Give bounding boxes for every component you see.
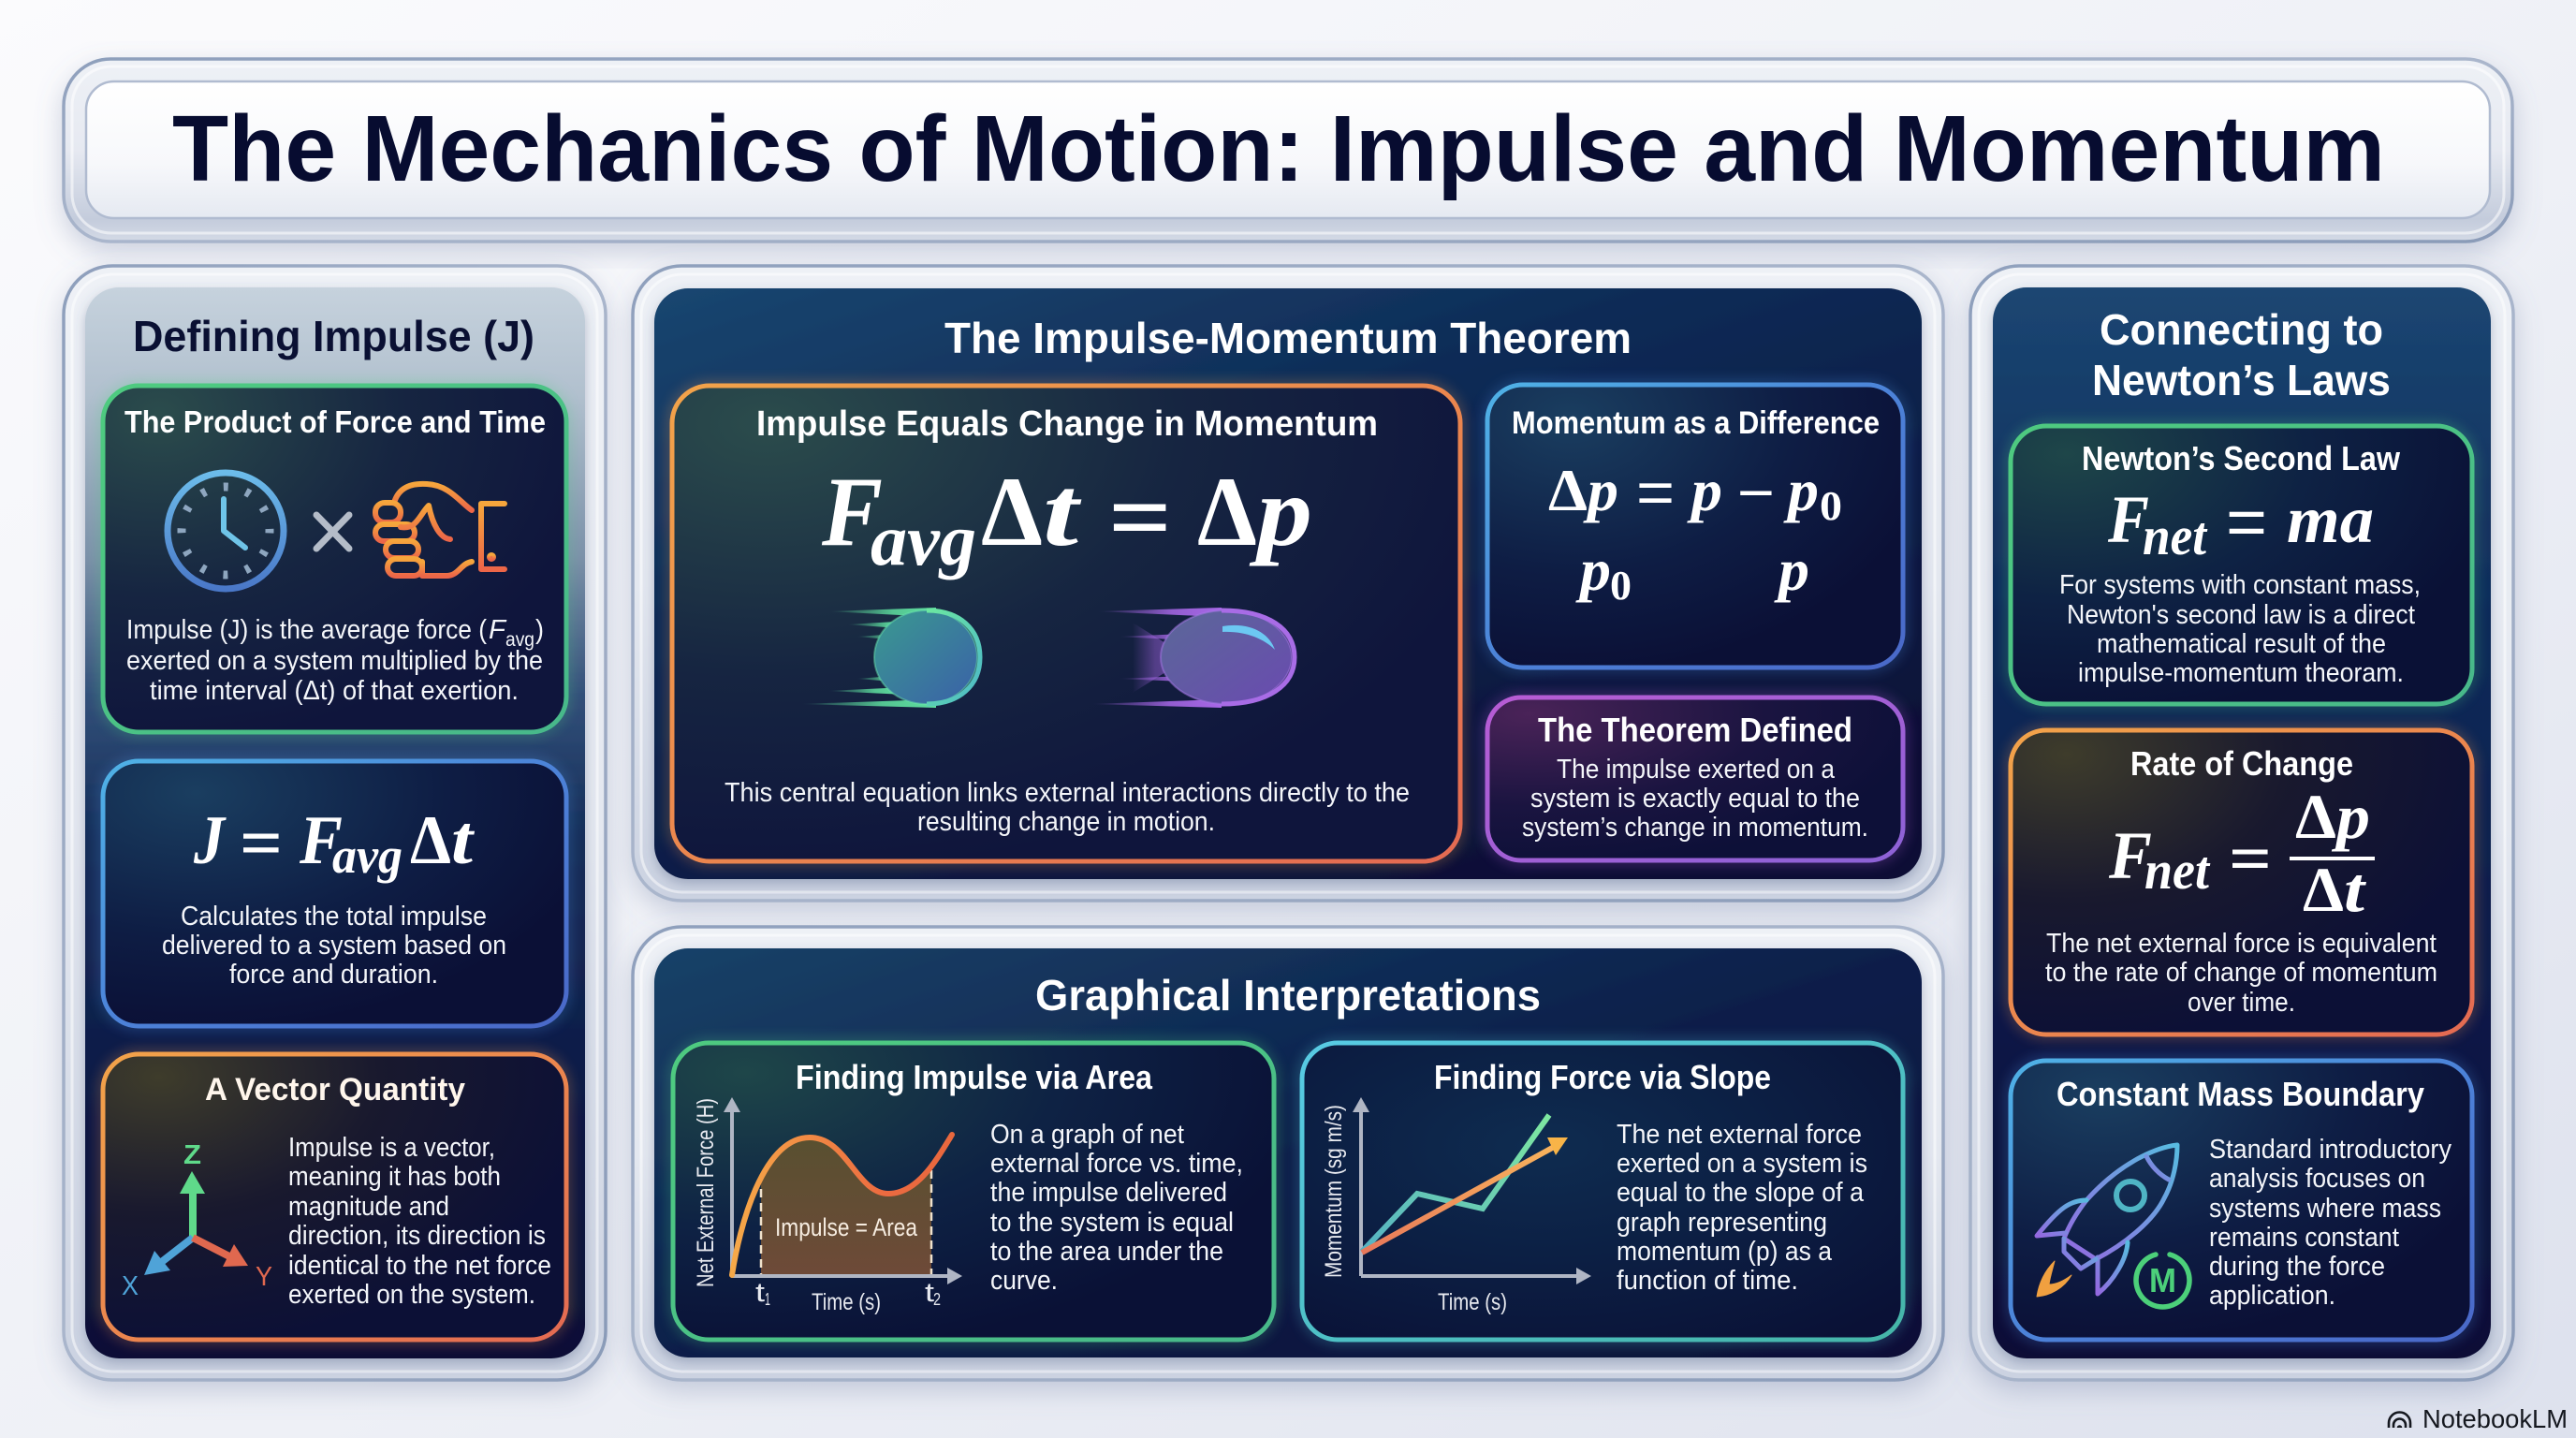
card body text [2059, 570, 2421, 688]
card body text: Calculates the total impulse [181, 902, 487, 932]
card body text: For systems with constant mass, [2059, 570, 2421, 600]
card body text: F [489, 615, 507, 645]
icon: xyz axes: Y [256, 1262, 272, 1292]
notebooklm watermark: NotebookLM [2422, 1404, 2568, 1433]
panel: defining impulse [64, 266, 606, 1380]
card heading: Impulse Equals Change in Momentum [756, 404, 1378, 444]
card body text: impulse-momentum theoram. [2078, 658, 2404, 688]
icon: constant mass badge: M [2149, 1261, 2176, 1299]
card body text: exerted on the system. [288, 1280, 535, 1310]
card body text [1617, 1120, 1867, 1296]
card body text: ) [535, 615, 544, 645]
card body text: momentum (p) as a [1617, 1237, 1833, 1267]
chart: force vs time: t [925, 1278, 934, 1308]
card body text: the impulse delivered [990, 1178, 1227, 1208]
card body text [2045, 929, 2437, 1018]
chart: momentum vs time: Time (s) [1438, 1289, 1507, 1315]
formula: F net = delta p over delta t: t [2344, 854, 2366, 925]
title: The Mechanics of Motion: Impulse and Momentum [172, 96, 2385, 201]
icon: xyz axes [122, 1140, 272, 1301]
card: finding force via slope [1302, 1043, 1903, 1340]
card heading: Finding Impulse via Area [796, 1058, 1153, 1096]
card: impulse equals change in momentum [672, 386, 1460, 861]
formula: main equation [821, 457, 1312, 580]
card body text: avg [505, 629, 534, 651]
icon: green moving ball [800, 608, 980, 708]
panel: graphical interpretations [633, 927, 1943, 1380]
icon: fist [375, 484, 505, 576]
card body text: force and duration. [229, 960, 438, 990]
card body text: system’s change in momentum. [1522, 813, 1868, 843]
formula: delta p: − [1737, 459, 1775, 526]
formula: J = F avg delta t: = [240, 805, 283, 882]
formula: F net = ma: = [2226, 485, 2267, 560]
icon: rocket [2037, 1145, 2177, 1297]
card body text [1522, 755, 1868, 843]
card: momentum as a difference [1487, 385, 1903, 668]
chart: force vs time: Time (s) [812, 1289, 881, 1315]
icon: purple moving ball [1090, 608, 1295, 708]
card body text: Impulse (J) is the average force ( [126, 615, 487, 645]
formula: J = F avg delta t: t [451, 802, 476, 879]
card body text: application. [2209, 1281, 2335, 1311]
formula: F net = ma: net [2143, 506, 2208, 566]
card body text: during the force [2209, 1252, 2385, 1282]
chart: momentum vs time: Momentum (sg m/s) [1321, 1105, 1347, 1278]
chart: force vs time: Impulse = Area [775, 1213, 918, 1241]
card heading: Rate of Change [2130, 744, 2353, 783]
card body text: delivered to a system based on [162, 931, 506, 961]
icon: xyz axes: Z [183, 1140, 201, 1170]
formula: delta p: Δ [1548, 457, 1588, 523]
heading: connecting to newton's laws: Connecting to [2100, 305, 2383, 354]
formula: initial and final momentum: p [1575, 536, 1611, 603]
card heading: Constant Mass Boundary [2056, 1075, 2424, 1113]
card: product of force and time [103, 386, 566, 732]
card body text: to the rate of change of momentum [2045, 958, 2437, 988]
formula: F net = ma: F [2107, 482, 2149, 557]
card body text: The net external force is equivalent [2046, 929, 2437, 959]
card: finding impulse via area [673, 1043, 1274, 1340]
card body text: curve. [990, 1266, 1058, 1296]
heading: connecting to newton's laws: Newton’s Laws [2092, 356, 2391, 404]
icon: xyz axes: X [122, 1271, 139, 1301]
chart: force vs time: 2 [933, 1290, 941, 1309]
card body text: exerted on a system multiplied by the [126, 646, 543, 676]
formula: F net = delta p over delta t: Δ [2303, 854, 2344, 925]
card body text: direction, its direction is [288, 1221, 546, 1251]
formula: F net = delta p over delta t: Δ [2295, 781, 2336, 852]
card body text: remains constant [2209, 1223, 2399, 1253]
chart: momentum vs time [1321, 1097, 1591, 1315]
formula: F net = delta p over delta t [2108, 781, 2375, 925]
card: vector quantity [103, 1054, 566, 1340]
heading: defining impulse: Defining Impulse (J) [133, 312, 534, 360]
card body text: meaning it has both [288, 1162, 501, 1192]
icon: clock [168, 473, 284, 589]
card body text [990, 1120, 1243, 1296]
formula: main equation: t [1043, 457, 1083, 566]
card body text: over time. [2188, 988, 2295, 1018]
card heading: The Theorem Defined [1538, 711, 1852, 749]
card body text: analysis focuses on [2209, 1164, 2425, 1194]
card body text: This central equation links external interactions directly to the [724, 778, 1410, 808]
formula: J = F avg delta t [193, 802, 476, 884]
formula: F net = delta p over delta t: net [2144, 840, 2211, 901]
card: rate of change [2011, 730, 2472, 1034]
formula: initial and final momentum: 0 [1610, 563, 1632, 609]
formula: F net = ma: ma [2287, 482, 2374, 557]
heading: theorem: The Impulse-Momentum Theorem [944, 314, 1632, 362]
formula: main equation: F [821, 457, 883, 566]
card: theorem defined [1487, 697, 1903, 860]
formula: J = F avg delta t: J [193, 802, 227, 879]
icon: constant mass badge [2136, 1255, 2189, 1307]
card body text: to the system is equal [990, 1208, 1234, 1238]
formula: main equation: p [1249, 457, 1312, 566]
formula: J = F avg delta t: Δ [410, 802, 451, 879]
card body text: On a graph of net [990, 1120, 1184, 1150]
card heading: A Vector Quantity [205, 1072, 465, 1108]
formula: initial and final momentum: p [1774, 536, 1809, 603]
formula: delta p: 0 [1820, 483, 1842, 529]
formula: delta p: p [1583, 457, 1618, 523]
icon: multiply sign [316, 515, 349, 549]
formula: J = F avg delta t: avg [332, 828, 402, 884]
card body text: graph representing [1617, 1208, 1827, 1238]
formula: delta p: = [1636, 459, 1675, 526]
heading: graphical interpretations: Graphical Interpretations [1035, 971, 1541, 1020]
card body text: function of time. [1617, 1266, 1798, 1296]
formula: main equation: avg [871, 499, 976, 580]
card body text: equal to the slope of a [1617, 1178, 1865, 1208]
card heading: Newton’s Second Law [2082, 439, 2401, 477]
formula: main equation: Δ [1197, 457, 1257, 566]
card body text: Newton's second law is a direct [2067, 600, 2415, 630]
formula: delta p: p [1783, 457, 1819, 523]
card heading: The Product of Force and Time [124, 404, 546, 439]
card body text [2209, 1135, 2452, 1311]
card heading: Momentum as a Difference [1512, 405, 1880, 441]
panel: impulse-momentum theorem [633, 266, 1943, 901]
card body text: exerted on a system is [1617, 1149, 1867, 1179]
card: constant mass boundary [2011, 1061, 2472, 1340]
formula: delta p [1548, 457, 1842, 529]
card: impulse formula [103, 761, 566, 1026]
formula: F net = delta p over delta t: = [2229, 821, 2272, 896]
card body text [724, 778, 1410, 837]
chart: force vs time: t [755, 1278, 765, 1308]
card body text: identical to the net force [288, 1251, 551, 1281]
card body text: time interval (Δt) of that exertion. [150, 676, 519, 706]
card: newton's second law [2011, 426, 2472, 704]
formula: F net = delta p over delta t: p [2332, 781, 2370, 852]
formula: J = F avg delta t: F [299, 802, 343, 879]
chart: force vs time: 1 [765, 1290, 770, 1309]
card body text: to the area under the [990, 1237, 1223, 1267]
card body text: system is exactly equal to the [1530, 784, 1860, 814]
panel: connecting to newton's laws [1970, 266, 2513, 1380]
card body text: resulting change in motion. [917, 807, 1215, 837]
formula: initial and final momentum [1575, 536, 1809, 609]
chart: force vs time: Net External Force (H) [693, 1098, 719, 1287]
chart: force vs time [693, 1097, 962, 1315]
card body text: magnitude and [288, 1192, 449, 1222]
formula: main equation: Δ [981, 457, 1043, 566]
card body text [126, 615, 544, 706]
card body text: systems where mass [2209, 1194, 2441, 1224]
formula: F net = ma [2107, 482, 2374, 566]
card body text: external force vs. time, [990, 1149, 1243, 1179]
card body text: mathematical result of the [2097, 629, 2386, 659]
card body text: Impulse is a vector, [288, 1133, 495, 1163]
formula: delta p: p [1687, 457, 1722, 523]
card body text: The impulse exerted on a [1557, 755, 1836, 785]
title banner [64, 59, 2512, 242]
card body text: The net external force [1617, 1120, 1862, 1150]
formula: main equation: = [1108, 462, 1172, 572]
card body text: Standard introductory [2209, 1135, 2452, 1165]
card heading: Finding Force via Slope [1434, 1058, 1771, 1096]
heading: connecting to newton's laws [2092, 305, 2391, 404]
card body text [288, 1133, 551, 1310]
formula: F net = delta p over delta t: F [2108, 818, 2152, 893]
card body text [162, 902, 506, 990]
